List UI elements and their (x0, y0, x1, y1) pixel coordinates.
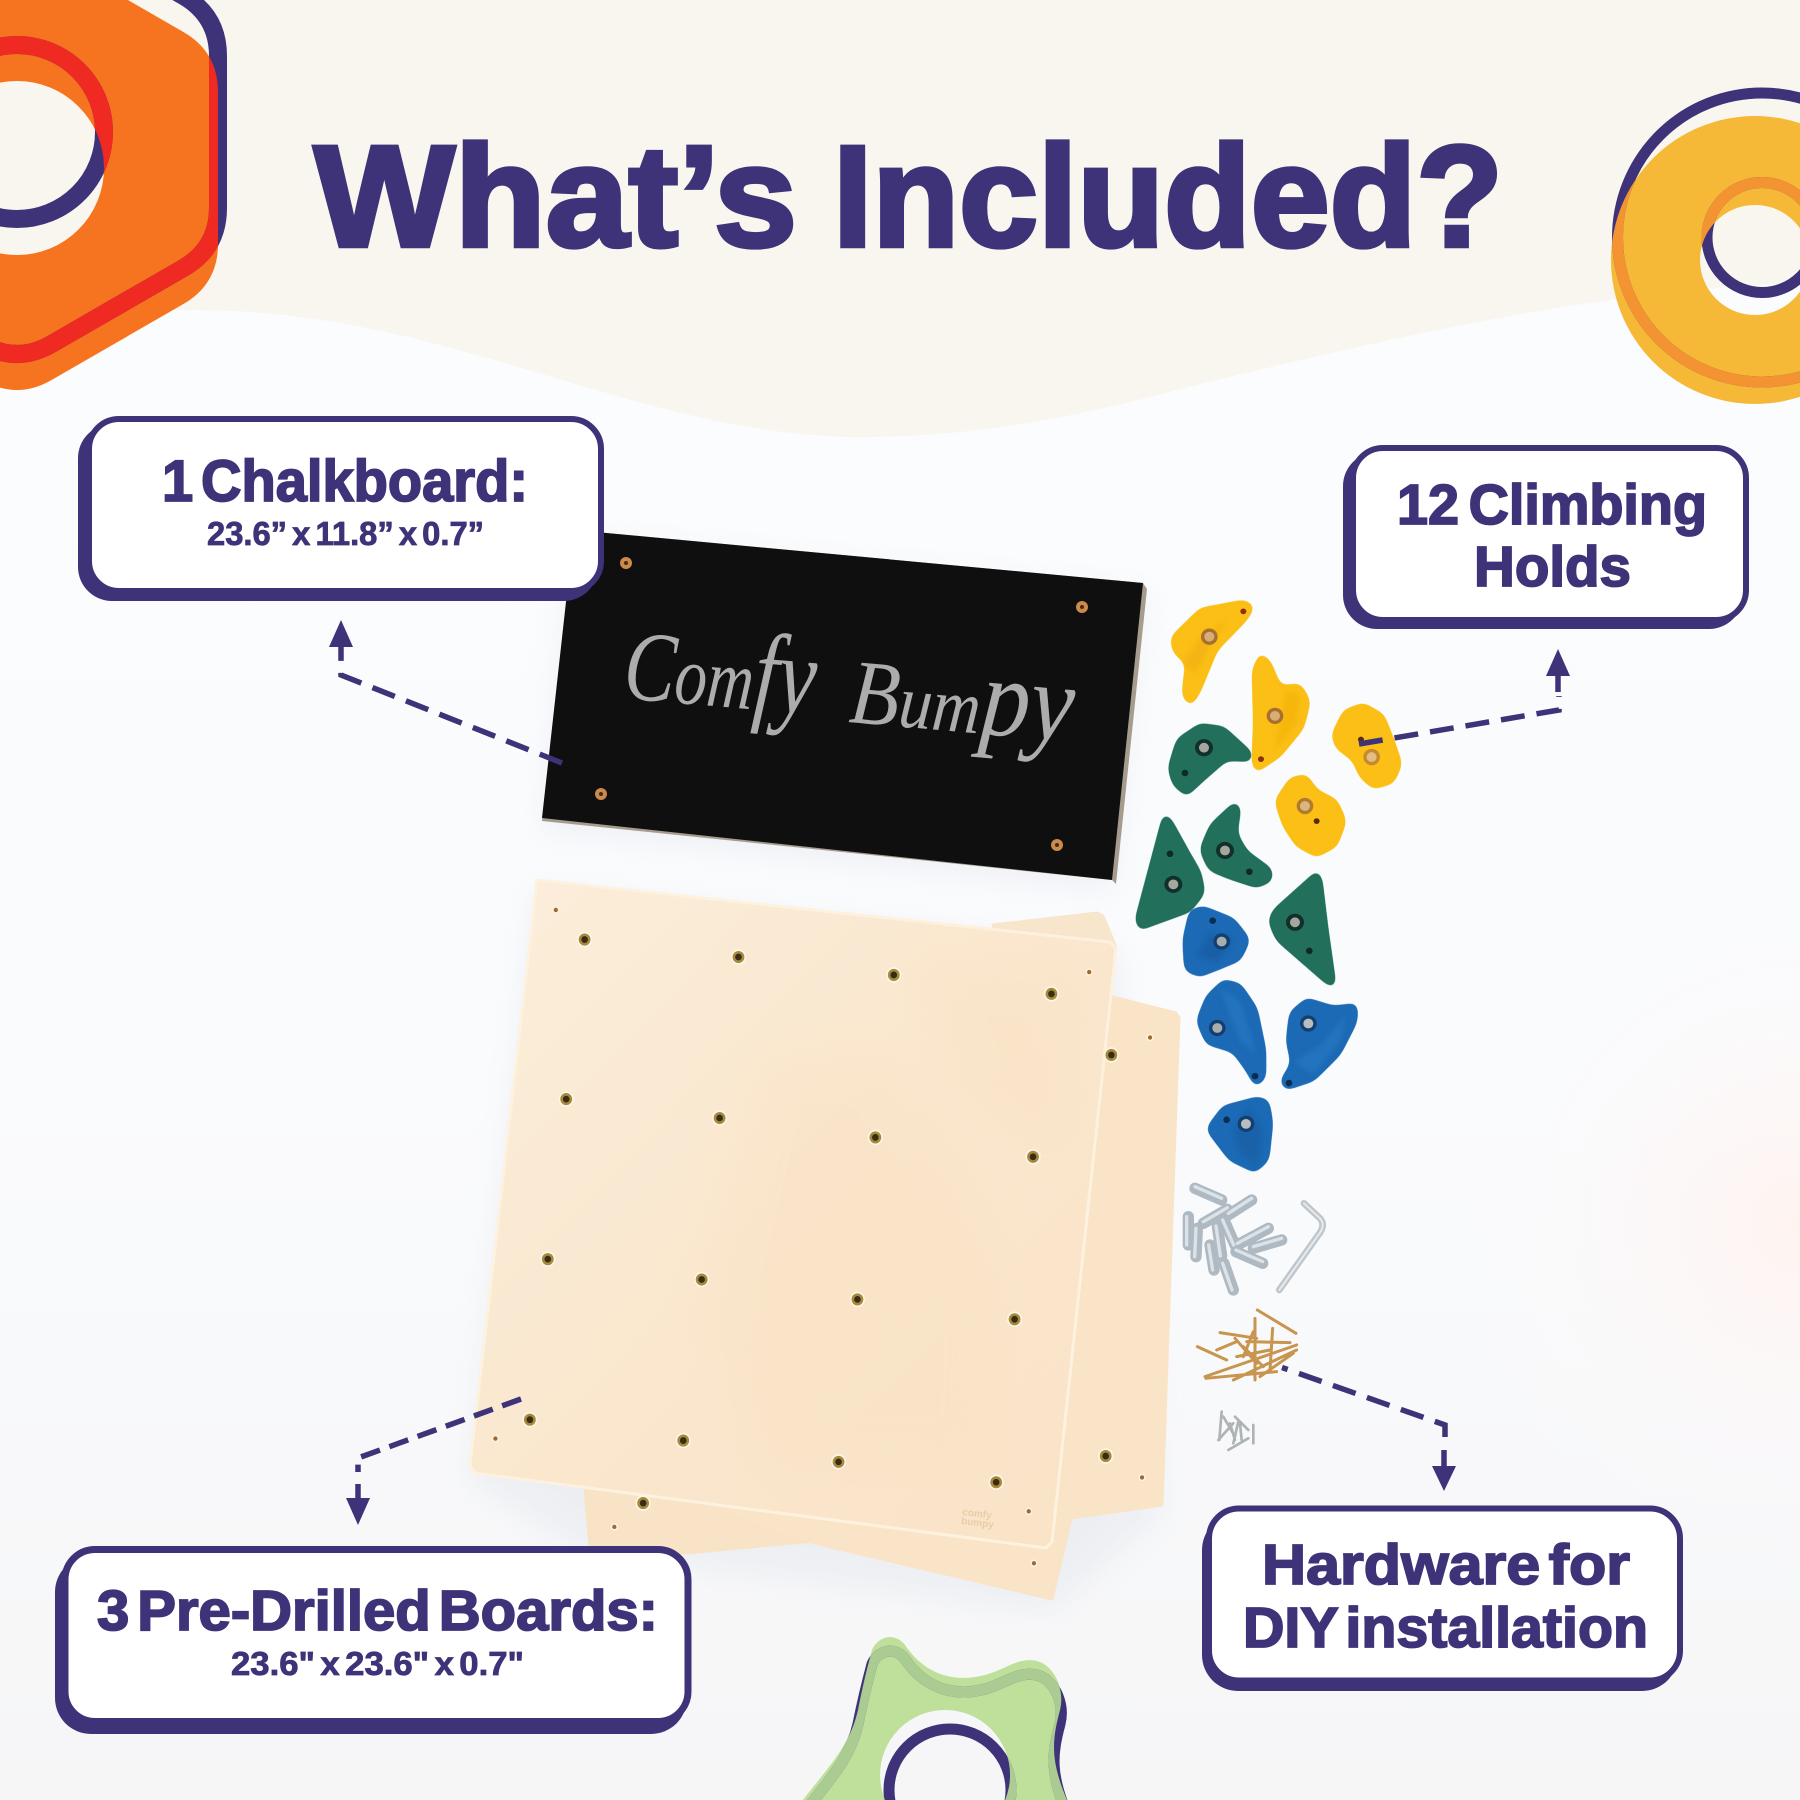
hold bolts (1164, 609, 1380, 1132)
callout: pre-drilled boards: 23.6" x 23.6" x 0.7" (231, 1645, 524, 1682)
callout: hardware (1202, 1508, 1680, 1691)
decorative yellow donut (1611, 93, 1800, 404)
ridge shading (1183, 621, 1347, 1166)
wooden boards stack (470, 880, 1179, 1599)
front board (470, 880, 1116, 1548)
callout: chalkboard: 23.6” x 11.8” x 0.7” (207, 515, 484, 552)
callout: pre-drilled boards: 3 Pre-Drilled Boards: (97, 1579, 658, 1643)
middle board (700, 997, 1179, 1599)
wood grain tint (700, 950, 1090, 1470)
callout: hardware: DIY installation (1243, 1596, 1648, 1660)
drilled holes (492, 906, 1154, 1567)
callout: pre-drilled boards (55, 1550, 688, 1734)
back board peeking at bottom (585, 1420, 900, 1553)
arrow: hardware to callout (1282, 1368, 1456, 1491)
climbing holds (1135, 600, 1402, 1173)
board logo (961, 1507, 996, 1531)
metal bolts (1188, 1188, 1282, 1290)
arrow: chalkboard to callout (329, 620, 562, 763)
blue holds (1183, 906, 1358, 1173)
callout: climbing holds: Holds (1474, 535, 1631, 599)
decorative orange hexagon nut (0, 0, 218, 390)
small silver screws (1218, 1412, 1253, 1450)
soft shadows under photo items (469, 540, 1162, 1610)
hardware: bolts, allen key and screws (1187, 1187, 1323, 1450)
callout: climbing holds (1343, 448, 1746, 629)
yellow holds (1170, 600, 1402, 857)
callout: chalkboard: 1 Chalkboard: (162, 449, 528, 514)
chalk handwriting: Bumpy (846, 623, 1080, 766)
board screws (595, 557, 1088, 851)
gold screws (1197, 1310, 1297, 1380)
title (314, 116, 1503, 277)
chalkboard (542, 530, 1147, 884)
decorative green shape (800, 1637, 1067, 1800)
callout: hardware: Hardware for (1262, 1533, 1630, 1597)
title: What’s (314, 116, 797, 277)
chalk handwriting: Comfy (620, 599, 822, 740)
title: Included? (833, 116, 1503, 277)
back board peeking at top (993, 913, 1116, 948)
arrow: holds to callout (1359, 649, 1570, 744)
allen key (1279, 1203, 1323, 1290)
board logo: bumpy (961, 1516, 995, 1531)
board logo: comfy (962, 1507, 993, 1522)
green holds (1135, 723, 1337, 988)
chalk handwriting (620, 599, 1080, 766)
top cream wave band (0, 0, 1800, 437)
callout: climbing holds: 12 Climbing (1397, 473, 1707, 537)
callout: chalkboard (78, 419, 601, 601)
arrow: boards to callout (346, 1399, 521, 1525)
